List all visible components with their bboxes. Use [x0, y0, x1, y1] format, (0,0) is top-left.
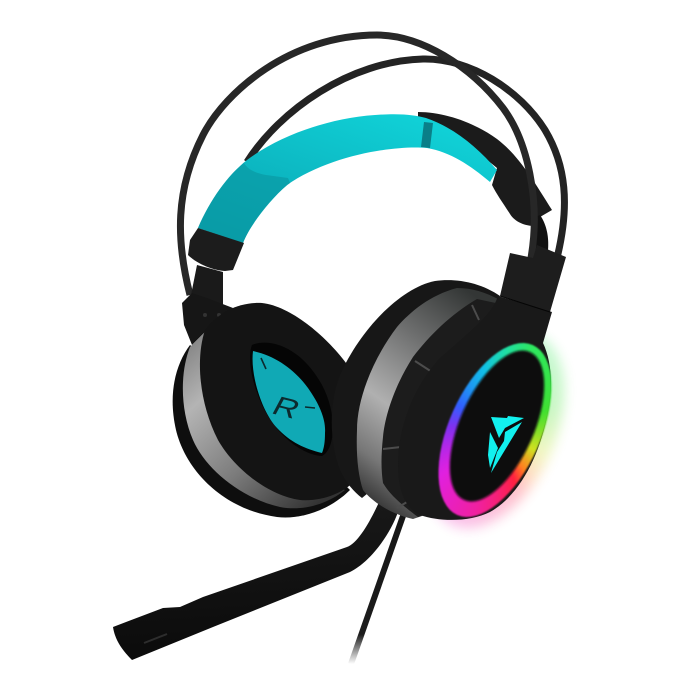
back shell [173, 345, 350, 518]
rgb light glow [371, 284, 619, 576]
band ribs [383, 305, 479, 508]
lining marks [261, 358, 315, 408]
left headband clip [188, 228, 244, 271]
silver band [183, 327, 345, 508]
outer cushion [332, 280, 500, 498]
silver band [357, 288, 500, 519]
ear cushion [200, 303, 355, 500]
outer headband wire [180, 35, 534, 295]
left yoke hinge [182, 293, 233, 345]
headband pad [188, 112, 552, 271]
microphone boom [113, 500, 398, 660]
teal lining [253, 351, 325, 453]
rear pivot of right yoke [530, 215, 548, 250]
teal padded cover [198, 114, 497, 243]
inner headband wire [247, 59, 564, 258]
rgb light ring [402, 313, 588, 547]
left ear cup [173, 303, 355, 518]
R mark: R [267, 391, 305, 424]
front shell [398, 296, 552, 520]
black right end of headband [418, 112, 552, 226]
logo [488, 416, 524, 473]
mic slot [144, 634, 167, 643]
teal cover stitch [421, 122, 433, 148]
right yoke [500, 245, 566, 312]
left yoke arm [190, 265, 223, 305]
teal seam shading [198, 163, 290, 243]
microphone cable [351, 516, 403, 664]
ear cup center disc [430, 337, 564, 515]
dark inner band [382, 299, 505, 517]
cushion hollow [250, 343, 333, 456]
right ear cup [332, 280, 619, 576]
